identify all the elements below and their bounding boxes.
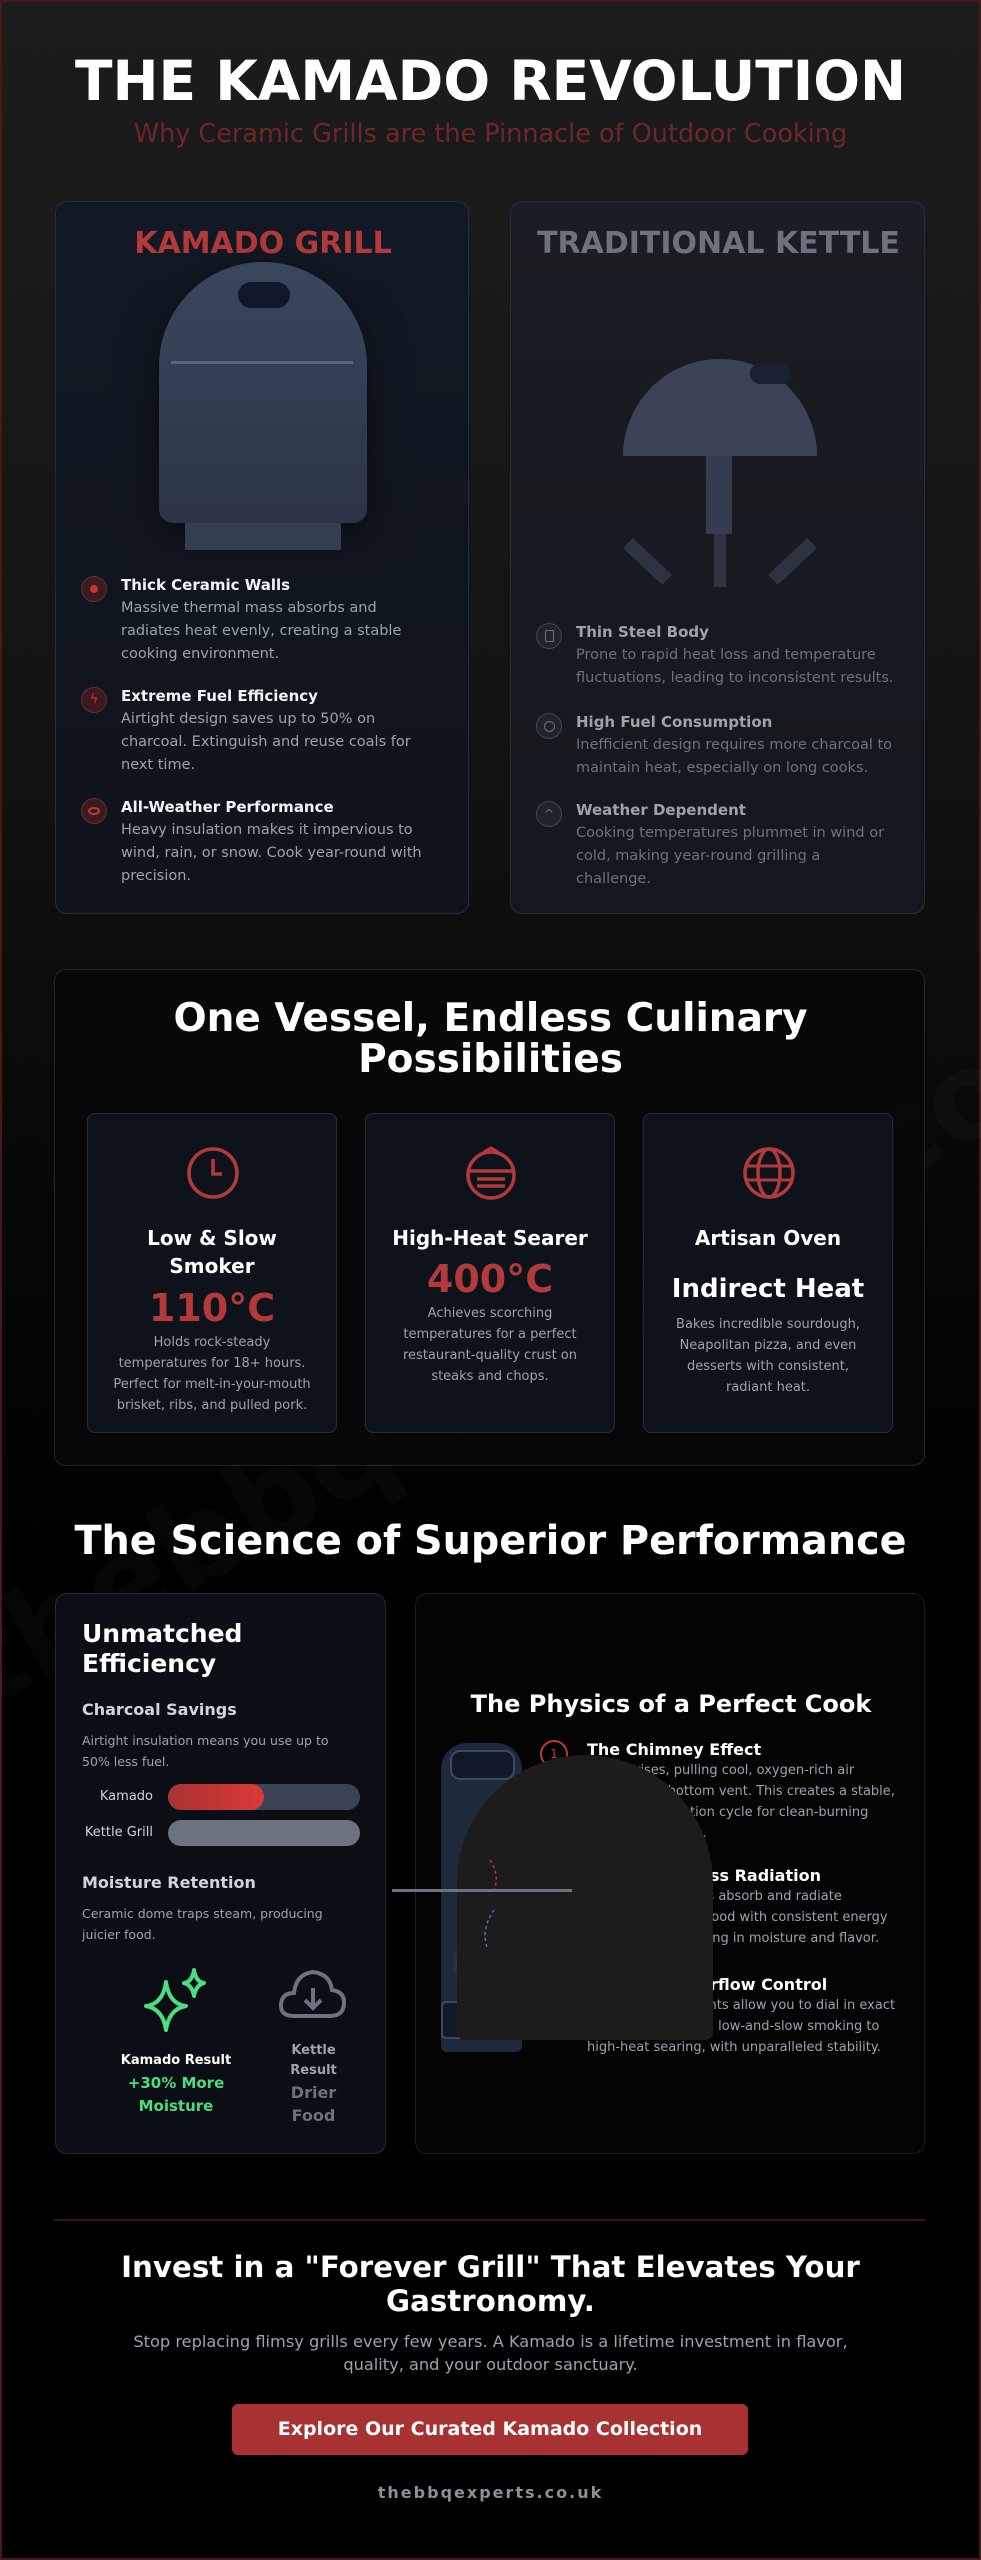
feature: fuel efficiency: Airtight design saves up to 50% on [121, 711, 375, 727]
result: kamado [121, 2053, 231, 2115]
feature: weather dependent: Weather Dependent [576, 801, 746, 819]
card: low & slow smoker [87, 1113, 337, 1433]
illustration: kettle [623, 359, 817, 587]
step: thermal mass radiation: Thick ceramic walls absorb and radiate [587, 1889, 842, 1904]
feature: fuel efficiency: ϟ [90, 692, 98, 707]
diagram: grill cross-section [441, 1743, 522, 2052]
feature: all-weather: All-Weather Performance [121, 798, 334, 816]
panel: unmatched efficiency: 50% less fuel. [82, 1754, 169, 1769]
step: thermal mass radiation: 2 Thermal Mass Radiation [587, 1866, 821, 1885]
step: airflow control [587, 1975, 895, 2055]
subheading: charcoal savings: Charcoal Savings [82, 1700, 237, 1719]
step: thermal mass radiation: from all sides, locking in moisture and flavor. [587, 1931, 879, 1946]
cta button: Explore Our Curated Kamado Collection [278, 2418, 702, 2440]
card: low & slow smoker: Low & Slow [147, 1226, 277, 1250]
result: kettle: Food [292, 2106, 335, 2125]
step: chimney effect: 1 [550, 1747, 558, 1761]
heading: physics: The Physics of a Perfect Cook [471, 1690, 871, 1718]
result: kettle: Drier [291, 2083, 336, 2102]
overlay: dome [457, 1755, 713, 2040]
step: chimney effect: and even cooking. [587, 1826, 706, 1841]
card: high-heat searer: restaurant-quality crust on [403, 1348, 577, 1363]
subtitle: Why Ceramic Grills are the Pinnacle of Outdoor Cooking [134, 119, 847, 149]
panel: unmatched efficiency: Ceramic dome traps steam, producing [82, 1906, 323, 1921]
heading: unmatched efficiency [82, 1619, 242, 1678]
cta text: quality, and your outdoor sanctuary. [343, 2355, 638, 2374]
card: high-heat searer: 400°C [427, 1257, 553, 1301]
feature: thin steel body: fluctuations, leading to inconsistent results. [576, 670, 894, 686]
panel: unmatched efficiency [55, 1593, 386, 2154]
title: THE KAMADO REVOLUTION [75, 49, 906, 113]
cta heading: Invest in a "Forever Grill" That Elevates Your [121, 2250, 860, 2284]
feature: fuel efficiency: next time. [121, 757, 195, 773]
illustration: kamado [157, 248, 369, 550]
feature: high fuel consumption: High Fuel Consumption [576, 713, 772, 731]
feature: all-weather: precision. [121, 868, 191, 884]
feature: thin steel body [536, 623, 894, 686]
footer: thebbqexperts.co.uk [378, 2483, 603, 2502]
step: chimney effect: through the bottom vent. This creates a stable, [587, 1784, 895, 1799]
feature: high fuel consumption: maintain heat, especially on long cooks. [576, 760, 868, 776]
feature: fuel efficiency [81, 687, 411, 773]
card: artisan oven: Neapolitan pizza, and even [680, 1338, 856, 1353]
result: kettle: Result [290, 2063, 337, 2078]
panel: unmatched efficiency: Airtight insulation means you use up to [82, 1733, 329, 1748]
feature: all-weather: Heavy insulation makes it impervious to [121, 822, 413, 838]
panel: kamado grill [55, 201, 469, 914]
feature: fuel efficiency: charcoal. Extinguish and reuse coals for [121, 734, 411, 750]
icon: grill [466, 1146, 516, 1200]
card: low & slow smoker: Perfect for melt-in-your-mouth [113, 1377, 311, 1392]
result: kamado: Kamado Result [121, 2053, 231, 2068]
feature: weather dependent: challenge. [576, 871, 651, 887]
panel: culinary possibilities [54, 969, 925, 1466]
cta text [133, 2332, 848, 2374]
panel: traditional kettle [510, 201, 925, 914]
bar chart: charcoal: Kettle Grill [85, 1825, 153, 1840]
card: low & slow smoker: Smoker [169, 1254, 255, 1278]
arrows: airflow [484, 1860, 497, 1950]
step: chimney effect: efficient convection cycle for clean-burning [587, 1805, 868, 1820]
result: kettle [290, 2043, 337, 2125]
icon: globe [743, 1147, 795, 1199]
step: thermal mass radiation: heat, surrounding food with consistent energy [587, 1910, 888, 1925]
card: high-heat searer: steaks and chops. [431, 1369, 549, 1384]
step: thermal mass radiation [587, 1866, 888, 1946]
panel: physics [415, 1593, 925, 2154]
feature: thick ceramic walls [81, 576, 401, 662]
feature: weather dependent: Cooking temperatures plummet in wind or [576, 825, 884, 841]
heading: unmatched efficiency: Efficiency [82, 1649, 216, 1678]
heading: unmatched efficiency: Unmatched [82, 1619, 242, 1648]
heading: one vessel [173, 996, 808, 1082]
card: high-heat searer [365, 1113, 615, 1433]
card: artisan oven [643, 1113, 893, 1433]
subheading: moisture retention: Moisture Retention [82, 1873, 256, 1892]
card: artisan oven: Bakes incredible sourdough, [676, 1317, 860, 1332]
card: low & slow smoker: Holds rock-steady [154, 1335, 270, 1350]
heading: kamado grill: KAMADO GRILL [134, 226, 392, 261]
feature: weather dependent: cold, making year-round grilling a [576, 848, 820, 864]
bar chart: charcoal [85, 1784, 360, 1846]
feature: thick ceramic walls: radiates heat evenly, creating a stable [121, 623, 401, 639]
feature: all-weather [81, 798, 422, 884]
icon: sparkles [144, 1968, 206, 2032]
cta heading: Gastronomy. [386, 2284, 595, 2318]
feature: weather dependent: ^ [544, 807, 554, 821]
heading: science: The Science of Superior Performance [74, 1518, 907, 1564]
feature: thick ceramic walls: cooking environment. [121, 646, 279, 662]
step: chimney effect [540, 1740, 895, 1841]
step: airflow control: 3 Precision Airflow Control [587, 1975, 827, 1994]
card: artisan oven: desserts with consistent, [687, 1359, 849, 1374]
card: artisan oven: Indirect Heat [672, 1274, 864, 1304]
icon: cloud download [279, 1970, 346, 2018]
feature: all-weather: wind, rain, or snow. Cook year-round with [121, 845, 422, 861]
icon: clock [187, 1147, 239, 1199]
feature: thick ceramic walls: Thick Ceramic Walls [121, 576, 290, 594]
feature: thick ceramic walls: Massive thermal mass absorbs and [121, 600, 377, 616]
panel: unmatched efficiency: juicier food. [82, 1927, 156, 1942]
bar chart: charcoal: Kamado [100, 1789, 153, 1804]
step: chimney effect: Hot air rises, pulling cool, oxygen-rich air [587, 1763, 854, 1778]
divider [54, 2219, 925, 2221]
cta button [232, 2404, 748, 2455]
card: low & slow smoker: temperatures for 18+ hours. [119, 1356, 305, 1371]
result: kettle: Kettle [291, 2043, 336, 2058]
card: high-heat searer: Achieves scorching [428, 1306, 552, 1321]
cta heading [121, 2250, 860, 2318]
card: artisan oven: Artisan Oven [695, 1226, 841, 1250]
cta text: Stop replacing flimsy grills every few years. A Kamado is a lifetime investment in flavor, [133, 2332, 848, 2351]
result: kamado: Moisture [139, 2097, 213, 2115]
feature: thin steel body: Prone to rapid heat loss and temperature [576, 647, 876, 663]
heading: one vessel: One Vessel, Endless Culinary [173, 996, 808, 1041]
card: high-heat searer: High-Heat Searer [392, 1226, 588, 1250]
heading: traditional kettle: TRADITIONAL KETTLE [537, 226, 900, 261]
result: kamado: +30% More [128, 2074, 224, 2092]
grate line [392, 1889, 572, 1892]
feature: thin steel body: Thin Steel Body [576, 623, 709, 641]
feature: high fuel consumption [536, 713, 892, 776]
card: high-heat searer: temperatures for a perfect [403, 1327, 577, 1342]
heading: one vessel: Possibilities [358, 1037, 623, 1082]
feature: high fuel consumption: Inefficient design requires more charcoal to [576, 737, 892, 753]
feature: fuel efficiency: Extreme Fuel Efficiency [121, 687, 318, 705]
card: low & slow smoker: brisket, ribs, and pulled pork. [117, 1398, 307, 1413]
step: airflow control: high-heat searing, with unparalleled stability. [587, 2040, 881, 2055]
step: airflow control: Top and bottom vents allow you to dial in exact [587, 1998, 895, 2013]
feature: weather dependent [536, 801, 884, 887]
step: chimney effect: The Chimney Effect [587, 1740, 761, 1759]
card: artisan oven: radiant heat. [726, 1380, 810, 1395]
card: low & slow smoker: 110°C [149, 1286, 275, 1330]
step: airflow control: temperatures, from low-and-slow smoking to [587, 2019, 879, 2034]
